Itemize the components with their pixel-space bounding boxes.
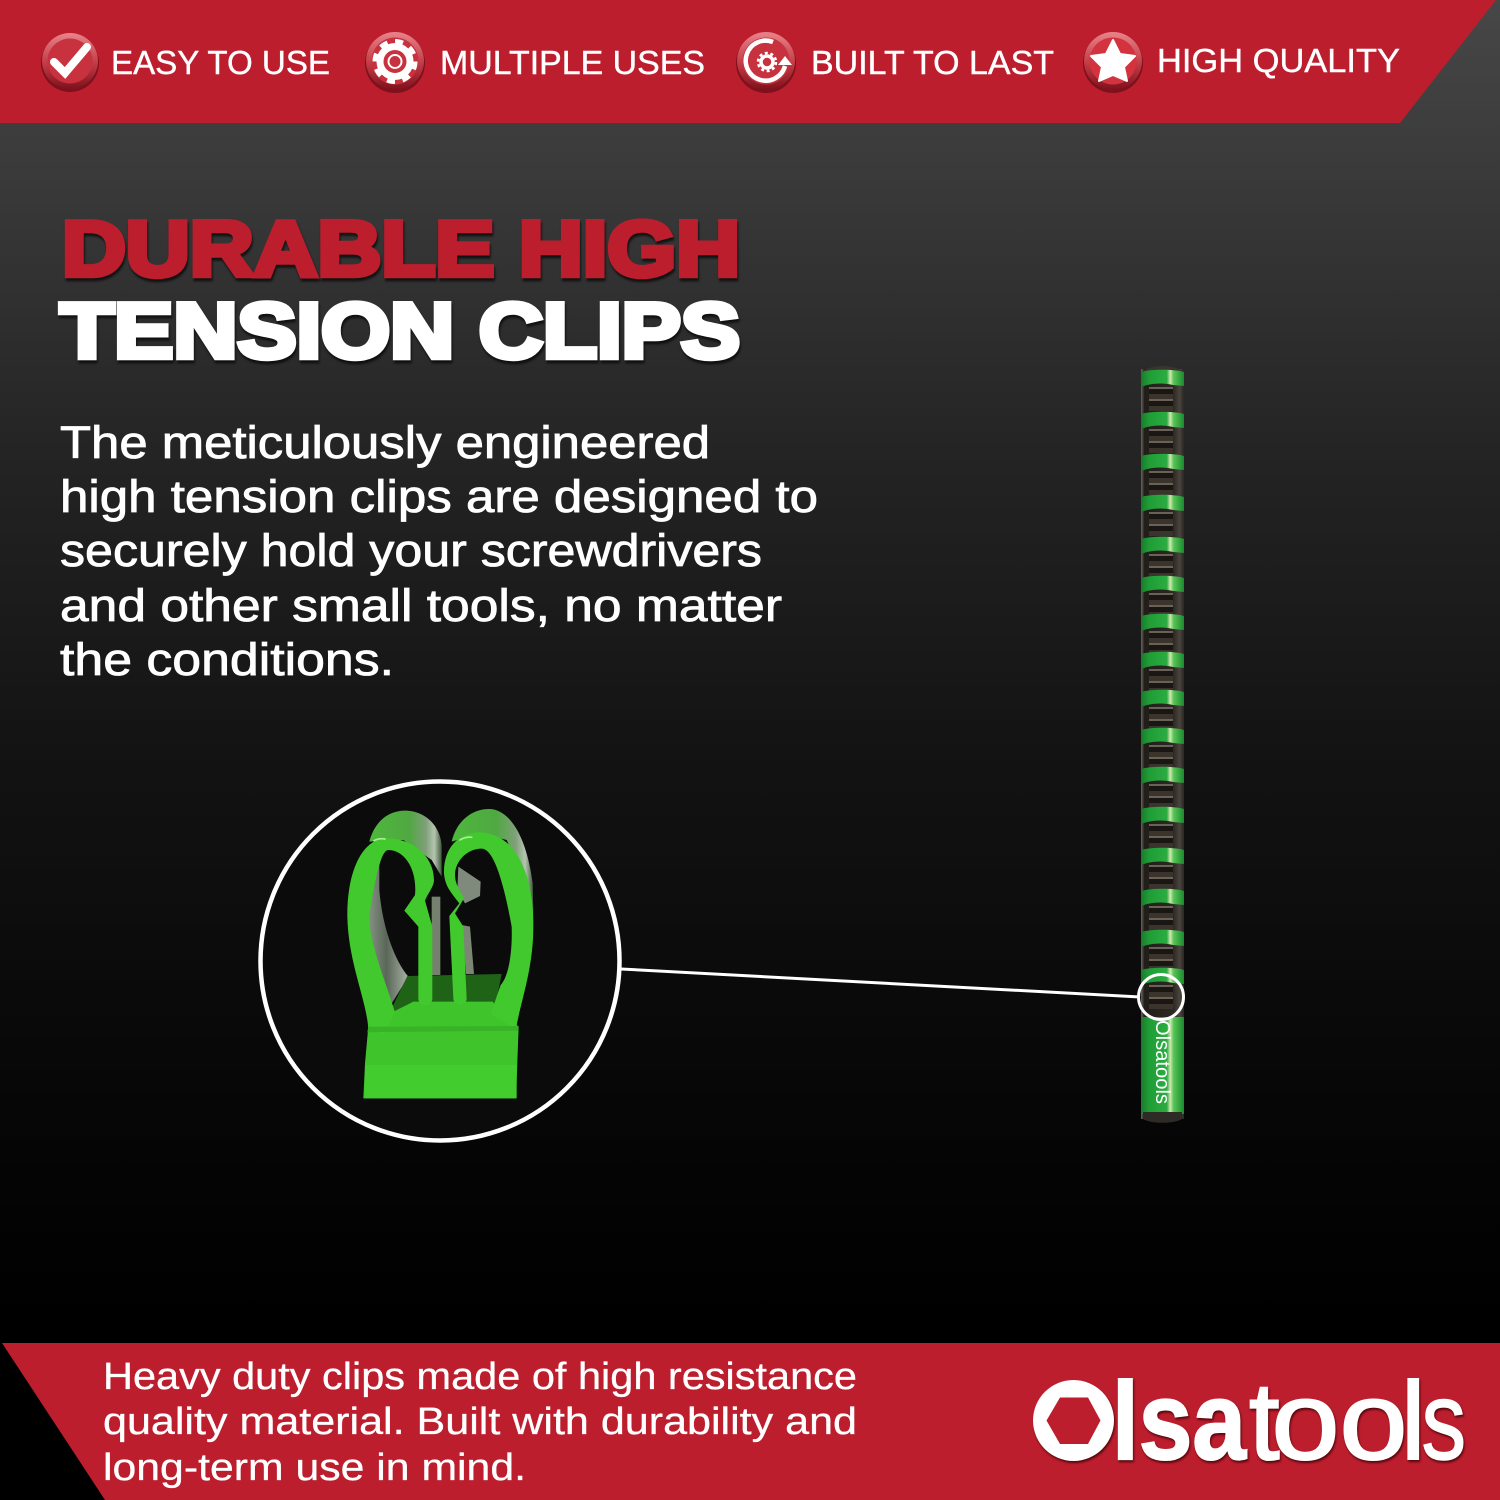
rail bottom cap (1143, 1112, 1182, 1123)
rail body (1141, 369, 1184, 1119)
banner text (103, 1356, 857, 1489)
banner text: quality material. Built with durability and (103, 1401, 857, 1443)
rail top cap (1142, 366, 1183, 372)
rail logo text: Olsatools (1151, 1020, 1173, 1104)
rail green end (1141, 1017, 1184, 1114)
heading (60, 204, 740, 374)
base fold shading (367, 1026, 518, 1032)
label: HIGH QUALITY (1157, 42, 1400, 79)
clip highlights (374, 837, 472, 841)
base (363, 1002, 519, 1098)
heading: DURABLE HIGH (62, 204, 740, 292)
label: EASY TO USE (111, 44, 330, 81)
logo: O (1031, 1360, 1117, 1483)
benefit: built to last (736, 32, 1054, 93)
logo: l (1401, 1360, 1425, 1483)
banner text: Heavy duty clips made of high resistance (103, 1356, 857, 1398)
back of clip: top edges (369, 811, 442, 877)
banner shape (2, 1343, 1500, 1500)
top banner (0, 0, 1496, 123)
benefit: easy to use (41, 33, 330, 92)
icon: check mark (41, 33, 99, 92)
body text (60, 417, 818, 685)
heading: TENSION CLIPS (60, 286, 740, 374)
banner text: long-term use in mind. (103, 1447, 526, 1489)
body text: the conditions. (60, 634, 394, 685)
icon: gear (365, 32, 425, 93)
body text: The meticulously engineered (60, 417, 710, 468)
back of clip: trough (390, 974, 502, 1012)
back of clip: grey bands (365, 853, 408, 1011)
body text: and other small tools, no matter (60, 580, 782, 631)
left arm (347, 838, 434, 1035)
magnifier circle (260, 782, 620, 1140)
callout leader line (621, 969, 1140, 997)
green clip illustration (347, 809, 533, 1098)
clip close-up callout (260, 782, 620, 1140)
rail clips (1141, 370, 1184, 1009)
product: magnetic rail (1141, 366, 1184, 1123)
label: BUILT TO LAST (811, 44, 1054, 81)
logo: t (1249, 1360, 1280, 1483)
detail ring on rail (1138, 974, 1184, 1020)
banner shape (0, 0, 1496, 123)
label: MULTIPLE USES (440, 44, 705, 81)
right arm (444, 832, 533, 1029)
logo: s (1422, 1360, 1466, 1483)
logo (1031, 1360, 1466, 1483)
body text: high tension clips are designed to (60, 471, 818, 522)
logo: oo (1272, 1360, 1408, 1483)
icon: star (1083, 32, 1143, 93)
icon: gear with arrow (736, 32, 796, 93)
bottom banner (2, 1343, 1500, 1500)
logo: lsa (1112, 1360, 1247, 1483)
body text: securely hold your screwdrivers (60, 525, 762, 576)
benefit: high quality (1083, 32, 1400, 93)
benefit: multiple uses (365, 32, 705, 93)
